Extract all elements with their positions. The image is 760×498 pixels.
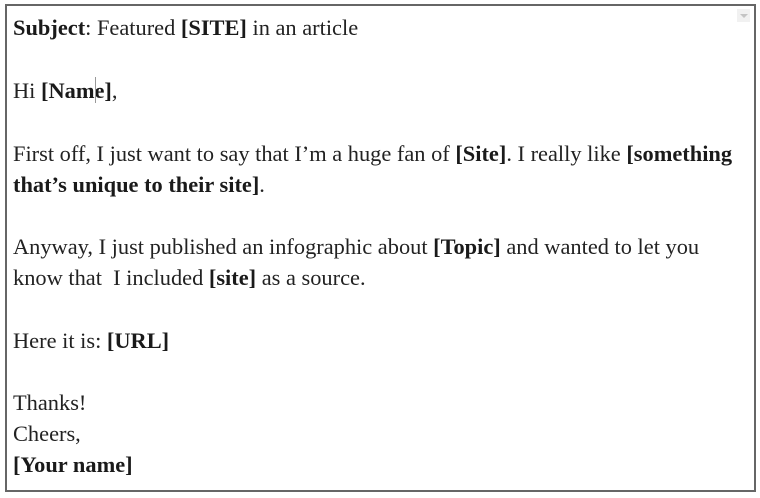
greeting: Hi [Name], bbox=[13, 78, 117, 103]
URL line: Here it is: [URL] bbox=[13, 328, 169, 353]
text cursor bbox=[95, 77, 96, 103]
paragraph: infographic mention: Anyway, I just published an infographic about [Topic] and wanted to let you know that I included [site] as a source. bbox=[13, 234, 699, 290]
sign-off: Thanks! Cheers, [Your name] bbox=[13, 390, 133, 477]
icon: dropdown handle bbox=[737, 9, 750, 22]
paragraph: introduction: First off, I just want to say that I’m a huge fan of [Site]. I really like [something that’s unique to their site]. bbox=[13, 141, 732, 197]
subject line: Subject: Featured [SITE] in an article bbox=[13, 15, 358, 40]
